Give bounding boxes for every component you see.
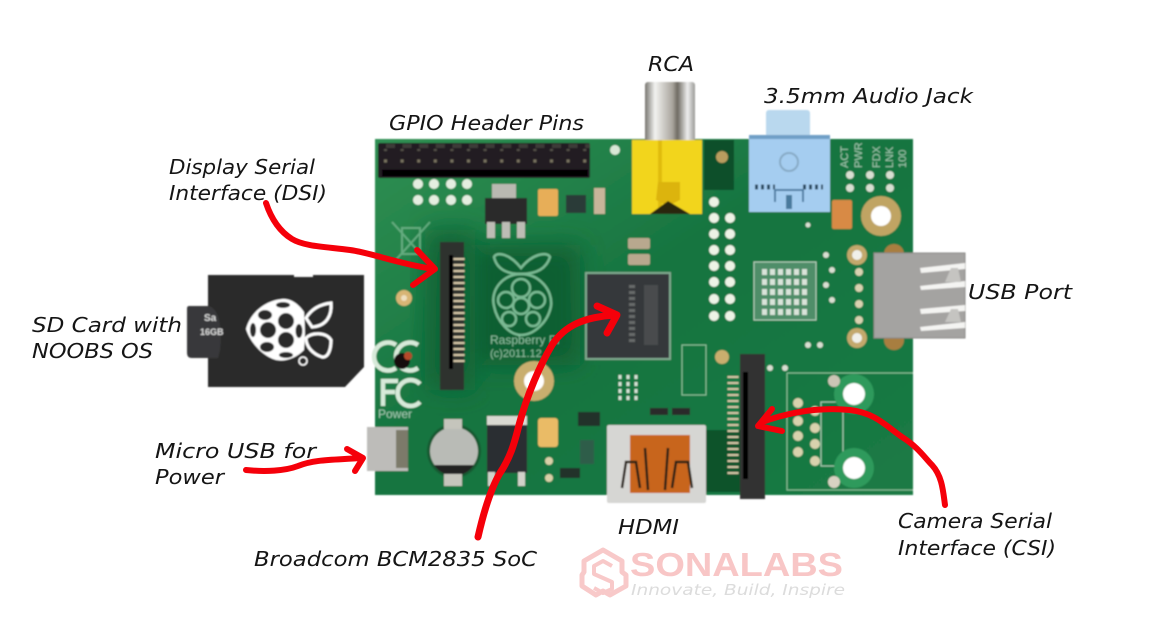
camera mounting holes <box>828 374 874 488</box>
voltage regulator <box>485 184 527 238</box>
icon: hexagon logo <box>582 550 626 595</box>
microSD card <box>187 306 224 358</box>
recycle symbol <box>392 222 430 262</box>
silkscreen status labels: 100 <box>897 150 909 168</box>
electrolytic mark <box>394 352 412 369</box>
tantalum capacitor top <box>538 189 558 216</box>
label: Display Serial Interface (DSI) <box>169 155 327 205</box>
dark central area <box>470 245 580 365</box>
label: Display Serial Interface (DSI): Display Serial <box>169 155 315 179</box>
IC3 grid <box>754 262 816 320</box>
label: Broadcom BCM2835 SoC: Broadcom BCM2835 SoC <box>254 547 537 571</box>
label: HDMI: HDMI <box>618 515 679 539</box>
silkscreen status labels <box>839 142 909 168</box>
board silkscreen name: (c)2011.12 <box>490 348 542 360</box>
label: SD Card with NOOBS OS: SD Card with <box>32 313 182 337</box>
label: 3.5mm Audio Jack: 3.5mm Audio Jack <box>764 84 975 108</box>
raspberry pi board <box>367 82 965 503</box>
label: RCA: RCA <box>648 52 694 76</box>
Broadcom SoC chip <box>586 273 670 359</box>
RCA plug metal <box>645 82 695 142</box>
DSI connector <box>440 242 464 390</box>
board silkscreen name: Raspberry Pi <box>490 333 559 347</box>
mounting hole left <box>396 290 412 306</box>
small parts right <box>767 171 894 371</box>
arrow: DSI <box>266 203 435 285</box>
P2 header holes <box>709 197 735 321</box>
label: Display Serial Interface (DSI): Interface (DSI) <box>169 181 327 205</box>
silkscreen status labels: ACT <box>839 146 851 168</box>
silkscreen status labels: PWR <box>853 142 865 168</box>
label: Micro USB for Power: Power <box>155 465 226 489</box>
mounting hole centre <box>514 361 554 401</box>
watermark name: SONALABS <box>630 546 843 583</box>
dark plane behind CSI <box>706 430 740 492</box>
watermark tagline: Innovate, Build, Inspire <box>631 581 845 599</box>
GPIO through holes <box>413 179 472 205</box>
label: SD Card with NOOBS OS: NOOBS OS <box>32 339 153 363</box>
microSD card: Sa <box>204 313 217 324</box>
label: SD Card with NOOBS OS <box>32 313 182 363</box>
board pcb <box>375 139 913 495</box>
silkscreen status labels: LNK <box>884 146 896 168</box>
label: Micro USB for Power <box>155 439 318 489</box>
camera header pads <box>793 398 820 466</box>
USB port <box>874 253 965 338</box>
raspberry logo white <box>246 299 331 365</box>
microSD card: 16GB <box>200 327 224 337</box>
label: Camera Serial Interface (CSI): Camera Serial <box>898 509 1052 533</box>
label: Camera Serial Interface (CSI) <box>898 509 1056 560</box>
small parts bottom <box>545 345 729 482</box>
ground plane <box>787 373 913 490</box>
USB pads <box>847 244 904 350</box>
mounting hole top right <box>861 196 901 236</box>
CSI connector <box>733 354 765 499</box>
orange capacitor <box>832 200 852 229</box>
arrow: CSI <box>758 409 945 505</box>
SD card body <box>208 275 364 387</box>
label: Micro USB for Power: Micro USB for <box>155 439 318 463</box>
arrow: SoC <box>478 306 617 537</box>
RCA yellow body <box>632 140 702 214</box>
tantalum capacitor bottom <box>538 418 558 447</box>
arrow: Micro USB <box>246 449 363 471</box>
silkscreen status labels: FDX <box>871 145 883 168</box>
certification marks <box>374 342 420 406</box>
label: Camera Serial Interface (CSI): Interface (CSI) <box>898 536 1056 560</box>
audio jack <box>749 110 830 212</box>
watermark logo <box>582 546 845 599</box>
GPIO header pins <box>378 143 590 178</box>
raspberry logo silkscreen <box>493 254 551 335</box>
label: GPIO Header Pins: GPIO Header Pins <box>389 111 584 135</box>
regulator RG2 <box>487 416 527 486</box>
SD card <box>187 275 364 387</box>
HDMI port <box>607 425 706 503</box>
electrolytic capacitor <box>427 419 481 486</box>
dark area around connector <box>425 230 475 390</box>
mounting pad top <box>716 151 728 163</box>
power label: Power <box>378 407 412 421</box>
component block <box>821 402 843 466</box>
micro USB port <box>367 427 408 471</box>
label: USB Port: USB Port <box>968 280 1073 304</box>
small components top <box>566 145 650 265</box>
board silkscreen name <box>490 333 559 360</box>
dark patch top of P2 <box>704 140 734 190</box>
